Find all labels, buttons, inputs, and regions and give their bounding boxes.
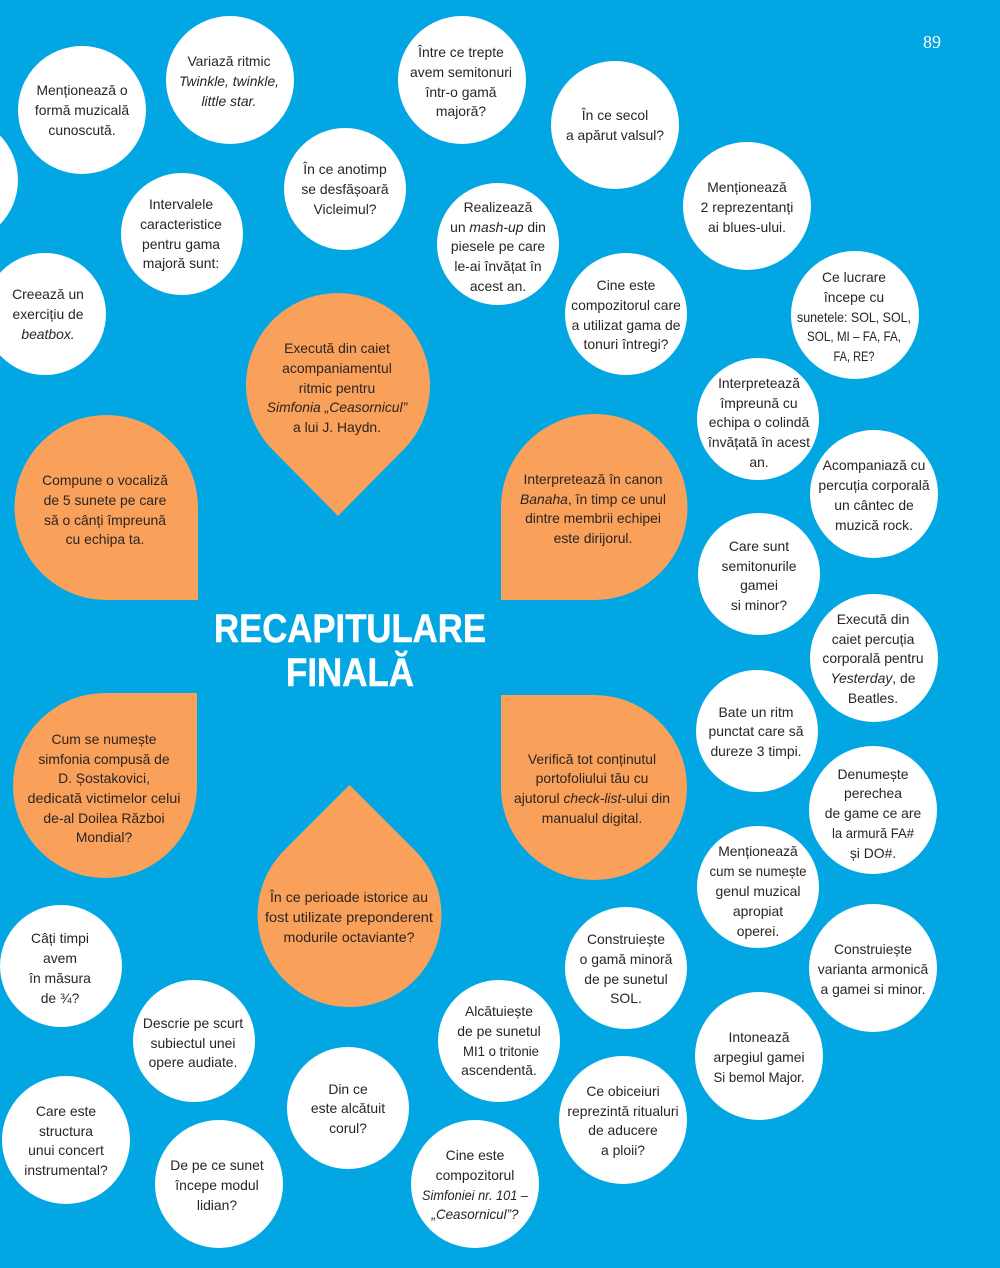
question circle: Ceasornicul bbox=[411, 1120, 539, 1248]
question circle: Yesterday bbox=[810, 594, 938, 722]
question circle: percuție corporală rock: Acompaniază cu bbox=[823, 457, 925, 473]
question circle: semitonuri si minor: si minor? bbox=[731, 597, 787, 613]
question circle: corul: Din ce bbox=[328, 1081, 368, 1097]
orange drop: lower left: Mondial? bbox=[76, 829, 132, 845]
question circle: beatbox: exercițiu de bbox=[12, 306, 84, 322]
question circle: timpi: de ¾? bbox=[41, 990, 80, 1006]
question circle: genul muzical: apropiat bbox=[733, 903, 783, 919]
orange drop: upper right bbox=[501, 414, 688, 600]
question circle: corul: este alcătuit bbox=[311, 1100, 385, 1116]
orange drop: upper right: dintre membrii echipei bbox=[525, 510, 661, 526]
question circle: genul muzical: cum se numește bbox=[710, 863, 807, 879]
question circle: ploi bbox=[559, 1056, 687, 1184]
question circle: concert instrumental: instrumental? bbox=[24, 1162, 108, 1178]
question circle: opere audiate: Descrie pe scurt bbox=[143, 1015, 243, 1031]
question circle: ritmic: Twinkle, twinkle, bbox=[179, 73, 279, 89]
question circle: ritmic: little star. bbox=[201, 93, 257, 109]
question circle: corul: corul? bbox=[329, 1120, 367, 1136]
question circle: percuție corporală rock bbox=[810, 430, 938, 558]
question circle: Vicleimul: se desfășoară bbox=[301, 181, 389, 197]
question circle: varianta armonică: a gamei si minor. bbox=[820, 981, 926, 997]
question circle: perechea de game: perechea bbox=[844, 785, 902, 801]
question circle: perechea de game: la armură FA# bbox=[832, 825, 914, 841]
question circle: Ceasornicul: Cine este bbox=[446, 1147, 505, 1163]
question circle: lucrare: începe cu bbox=[823, 289, 884, 305]
question circle: Ceasornicul: compozitorul bbox=[436, 1167, 514, 1183]
question circle: blues: 2 reprezentanți bbox=[701, 199, 793, 215]
orange drop: upper left: de 5 sunete pe care bbox=[44, 492, 167, 508]
question circle: tonuri întregi: Cine este bbox=[597, 277, 656, 293]
question circle: colindă: an. bbox=[749, 454, 769, 470]
question circle: mash-up bbox=[437, 183, 559, 305]
question circle: ritm punctat: Bate un ritm bbox=[719, 704, 793, 720]
question circle: arpegiul: Si bemol Major. bbox=[714, 1069, 804, 1085]
question circle: colindă: împreună cu bbox=[719, 395, 798, 411]
question circle: modul lidian bbox=[155, 1120, 283, 1248]
question circle: modul lidian: începe modul bbox=[174, 1177, 259, 1193]
question circle: genul muzical bbox=[697, 826, 819, 948]
orange drop: bottom: În ce perioade istorice au bbox=[269, 889, 428, 905]
question circle: intervale: pentru gama bbox=[142, 236, 220, 252]
question circle: lucrare: sunetele: SOL, SOL, bbox=[797, 309, 911, 325]
question circle: ritmic: Variază ritmic bbox=[187, 53, 271, 69]
question circle: concert instrumental: structura bbox=[39, 1123, 93, 1139]
question circle: semitonuri si minor: Care sunt bbox=[729, 538, 789, 554]
orange drop: lower right: Verifică tot conținutul bbox=[528, 751, 656, 767]
orange drop: upper right: este dirijorul. bbox=[554, 530, 632, 546]
question circle: blues: Menționează bbox=[707, 179, 787, 195]
orange drop: lower right bbox=[501, 695, 687, 880]
question circle: intervale bbox=[121, 173, 243, 295]
question circle: timpi bbox=[0, 905, 122, 1027]
orange drop: top: acompaniamentul bbox=[282, 360, 392, 376]
question circle: ritm punctat: punctat care să bbox=[709, 723, 804, 739]
orange drop: top: Simfonia „Ceasornicul” bbox=[267, 399, 409, 415]
question circle: beatbox: beatbox. bbox=[21, 326, 75, 342]
question circle: gamă minoră SOL bbox=[565, 907, 687, 1029]
question circle: lucrare: FA, RE? bbox=[834, 348, 875, 364]
question circle: gamă minoră SOL: Construiește bbox=[587, 931, 665, 947]
question circle: ploi: Ce obiceiuri bbox=[586, 1083, 660, 1099]
question circle: colindă: învățată în acest bbox=[707, 434, 810, 450]
question circle: Yesterday: Execută din bbox=[837, 611, 909, 627]
question circle: percuție corporală rock: muzică rock. bbox=[835, 517, 913, 533]
question circle: modul lidian: De pe ce sunet bbox=[170, 1157, 264, 1173]
question circle: percuție corporală rock: percuția corporală bbox=[818, 477, 930, 493]
question circle: valsul bbox=[551, 61, 679, 189]
orange drop: lower right: manualul digital. bbox=[542, 810, 642, 826]
orange drop: top: Execută din caiet bbox=[284, 340, 390, 356]
question circle: lucrare: SOL, MI – FA, FA, bbox=[807, 328, 901, 344]
question circle: semitonuri: într-o gamă bbox=[424, 84, 497, 100]
question circle: tritonie: MI1 o tritonie bbox=[463, 1043, 539, 1059]
question circle: valsul: a apărut valsul? bbox=[566, 127, 664, 143]
orange drop: bottom: modurile octaviante? bbox=[284, 929, 415, 945]
question circle: Ceasornicul: „Ceasornicul”? bbox=[431, 1206, 519, 1222]
question circle: blues bbox=[683, 142, 811, 270]
question circle: percuție corporală rock: un cântec de bbox=[834, 497, 914, 513]
question circle: mash-up: acest an. bbox=[470, 278, 526, 294]
question circle: Ceasornicul: Simfoniei nr. 101 – bbox=[422, 1187, 528, 1203]
question circle: concert instrumental bbox=[2, 1076, 130, 1204]
question circle: modul lidian: lidian? bbox=[197, 1197, 237, 1213]
question circle: gamă minoră SOL: de pe sunetul bbox=[584, 971, 668, 987]
page number: 89 bbox=[923, 32, 941, 52]
question circle: arpegiul bbox=[695, 992, 823, 1120]
question circle: Vicleimul bbox=[284, 128, 406, 250]
question circle: timpi: în măsura bbox=[28, 970, 91, 986]
question circle: semitonuri si minor bbox=[698, 513, 820, 635]
orange drop: lower left: de-al Doilea Război bbox=[43, 810, 165, 826]
question circle: intervale: majoră sunt: bbox=[143, 255, 219, 271]
question circle: perechea de game: Denumește bbox=[837, 766, 909, 782]
question circle: tonuri întregi bbox=[565, 253, 687, 375]
partial circle at left edge bbox=[0, 116, 18, 244]
question circle: mash-up: un mash-up din bbox=[450, 219, 546, 235]
question circle: ploi: a ploii? bbox=[601, 1142, 645, 1158]
orange drop: upper left bbox=[14, 415, 198, 600]
question circle: colindă: Interpretează bbox=[718, 375, 800, 391]
question circle: perechea de game: de game ce are bbox=[825, 805, 922, 821]
orange drop: lower left: D. Șostakovici, bbox=[58, 770, 150, 786]
question circle: beatbox: Creează un bbox=[12, 286, 84, 302]
question circle: blues: ai blues-ului. bbox=[708, 219, 786, 235]
orange drop: lower left: dedicată victimelor celui bbox=[28, 790, 180, 806]
orange drop: bottom bbox=[258, 785, 441, 1007]
question circle: formă muzicală: Menționează o bbox=[36, 82, 128, 98]
question circle: gamă minoră SOL: o gamă minoră bbox=[580, 951, 673, 967]
question circle: corul bbox=[287, 1047, 409, 1169]
orange drop: top bbox=[246, 293, 430, 516]
question circle: formă muzicală bbox=[18, 46, 146, 174]
orange drop: lower right: portofoliului tău cu bbox=[536, 770, 648, 786]
question circle: mash-up: le-ai învățat în bbox=[454, 258, 542, 274]
question circle: gamă minoră SOL: SOL. bbox=[610, 990, 642, 1006]
orange drop: lower left: Cum se numește bbox=[52, 731, 157, 747]
orange drop: upper left: să o cânți împreună bbox=[44, 512, 166, 528]
question circle: colindă bbox=[697, 358, 819, 480]
question circle: perechea de game bbox=[809, 746, 937, 874]
question circle: lucrare bbox=[791, 251, 919, 379]
question circle: semitonuri: majoră? bbox=[436, 103, 486, 119]
question circle: intervale: caracteristice bbox=[140, 216, 222, 232]
question circle: lucrare: Ce lucrare bbox=[822, 269, 886, 285]
orange drop: top: ritmic pentru bbox=[299, 380, 375, 396]
question circle: timpi: avem bbox=[43, 950, 77, 966]
question circle: varianta armonică: varianta armonică bbox=[818, 961, 928, 977]
question circle: timpi: Câți timpi bbox=[31, 930, 89, 946]
question circle: ploi: de aducere bbox=[588, 1122, 658, 1138]
question circle: formă muzicală: cunoscută. bbox=[48, 122, 116, 138]
question circle: semitonuri bbox=[398, 16, 526, 144]
orange drop: bottom: fost utilizate preponderent bbox=[265, 909, 433, 925]
question circle: ploi: reprezintă ritualuri bbox=[567, 1103, 679, 1119]
question circle: opere audiate bbox=[133, 980, 255, 1102]
question circle: arpegiul: Intonează bbox=[728, 1029, 790, 1045]
orange drop: top: a lui J. Haydn. bbox=[293, 419, 381, 435]
question circle: concert instrumental: Care este bbox=[36, 1103, 96, 1119]
question circle: tritonie: ascendentă. bbox=[461, 1062, 537, 1078]
question circle: genul muzical: operei. bbox=[737, 923, 779, 939]
orange drop: upper right: Interpretează în canon bbox=[523, 471, 663, 487]
question circle: semitonuri si minor: semitonurile bbox=[722, 558, 797, 574]
question circle: genul muzical: genul muzical bbox=[716, 883, 800, 899]
question circle: tonuri întregi: compozitorul care bbox=[571, 297, 681, 313]
question circle: mash-up: Realizează bbox=[464, 199, 533, 215]
question circle: ritm punctat bbox=[696, 670, 818, 792]
question circle: Vicleimul: În ce anotimp bbox=[302, 161, 387, 177]
question circle: arpegiul: arpegiul gamei bbox=[713, 1049, 805, 1065]
title: FINALĂ bbox=[286, 650, 414, 695]
question circle: Yesterday: caiet percuția bbox=[832, 631, 915, 647]
question circle: Vicleimul: Vicleimul? bbox=[313, 201, 377, 217]
question circle: perechea de game: și DO#. bbox=[850, 845, 896, 861]
question circle: Yesterday: corporală pentru bbox=[822, 650, 924, 666]
question circle: semitonuri si minor: gamei bbox=[740, 577, 778, 593]
question circle: Yesterday: Yesterday, de bbox=[831, 670, 916, 686]
question circle: varianta armonică: Construiește bbox=[834, 941, 912, 957]
question circle: tritonie: de pe sunetul bbox=[457, 1023, 541, 1039]
question circle: ritm punctat: dureze 3 timpi. bbox=[710, 743, 802, 759]
question circle: opere audiate: subiectul unei bbox=[151, 1035, 235, 1051]
question circle: semitonuri: Între ce trepte bbox=[417, 44, 504, 60]
orange drop: upper left: cu echipa ta. bbox=[66, 531, 144, 547]
question circle: intervale: Intervalele bbox=[149, 196, 213, 212]
title bbox=[214, 607, 486, 695]
question circle: tonuri întregi: a utilizat gama de bbox=[572, 317, 681, 333]
question circle: tonuri întregi: tonuri întregi? bbox=[584, 336, 669, 352]
question circle: tritonie: Alcătuiește bbox=[465, 1003, 533, 1019]
orange drop: lower left bbox=[13, 693, 197, 878]
orange drop: upper right: Banaha, în timp ce unul bbox=[520, 491, 666, 507]
question circle: semitonuri: avem semitonuri bbox=[410, 64, 512, 80]
question circle: concert instrumental: unui concert bbox=[28, 1142, 104, 1158]
question circle: varianta armonică bbox=[809, 904, 937, 1032]
question circle: genul muzical: Menționează bbox=[718, 843, 798, 859]
question circle: valsul: În ce secol bbox=[581, 107, 648, 123]
question circle: tritonie bbox=[438, 980, 560, 1102]
orange drop: lower left: simfonia compusă de bbox=[38, 751, 170, 767]
orange drop: lower right: ajutorul check-list-ului din bbox=[514, 790, 670, 806]
question circle: beatbox bbox=[0, 253, 106, 375]
question circle: ritmic bbox=[166, 16, 294, 144]
orange drop: upper left: Compune o vocaliză bbox=[42, 472, 168, 488]
question circle: colindă: echipa o colindă bbox=[709, 414, 809, 430]
question circle: opere audiate: opere audiate. bbox=[149, 1054, 237, 1070]
question circle: Yesterday: Beatles. bbox=[848, 690, 898, 706]
question circle: mash-up: piesele pe care bbox=[451, 238, 545, 254]
question circle: formă muzicală: formă muzicală bbox=[35, 102, 129, 118]
title: RECAPITULARE bbox=[214, 607, 486, 651]
